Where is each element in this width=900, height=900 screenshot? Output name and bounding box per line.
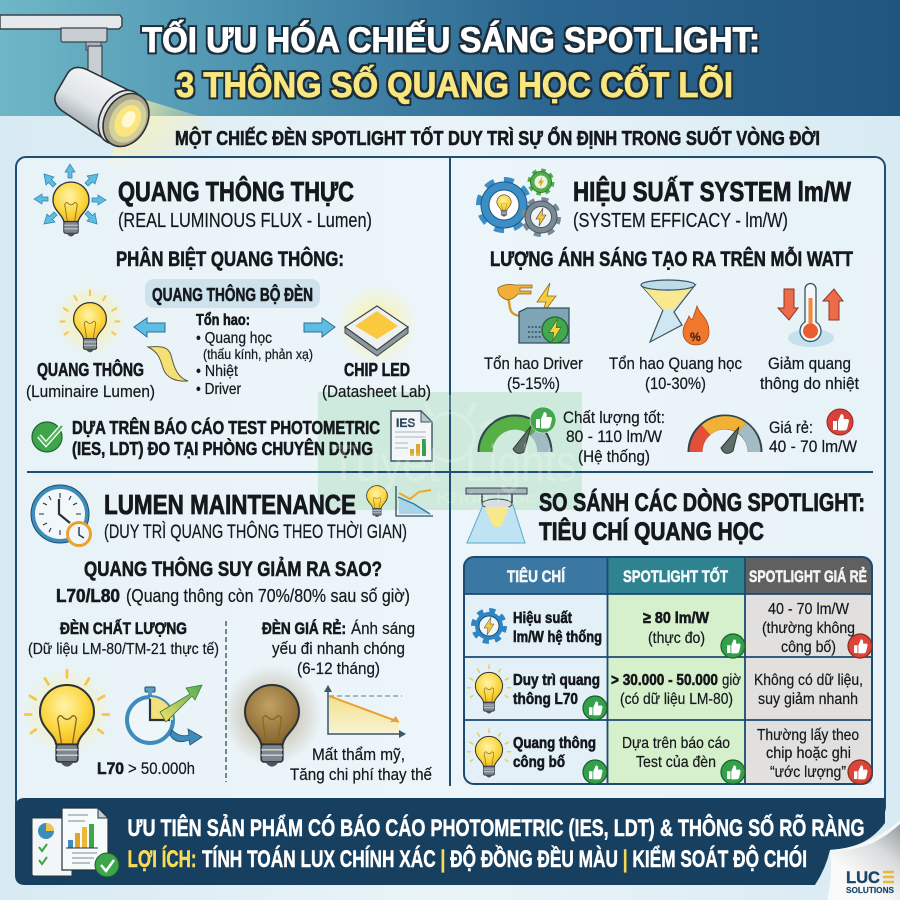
- header band: [0, 0, 900, 116]
- icon: track spotlight: [0, 15, 158, 155]
- row: published flux: Test của đèn: [636, 754, 716, 771]
- row: efficacy: Hiệu suất: [513, 610, 572, 627]
- watermark background inside panel: [318, 392, 582, 510]
- icon: driver loss: [498, 283, 569, 343]
- icon: IES document: [391, 411, 432, 461]
- quality lamp label: (Dữ liệu LM-80/TM-21 thực tế): [28, 641, 219, 658]
- row: published flux: Thường lấy theo: [757, 727, 859, 744]
- L70 definition: (Quang thông còn 70%/80% sau số giờ): [126, 586, 410, 606]
- photometric note: (IES, LDT) ĐO TẠI PHÒNG CHUYÊN DỤNG: [72, 438, 373, 459]
- row: published flux: Quang thông: [513, 735, 596, 752]
- heading: [539, 487, 865, 546]
- section heading: QUANG THÔNG SUY GIẢM RA SAO?: [84, 557, 382, 581]
- row: maintenance: (có dữ liệu LM-80): [620, 691, 733, 708]
- gauge: cheap quality: [695, 422, 755, 453]
- label: luminaire lumen: QUANG THÔNG: [37, 359, 144, 380]
- L70 definition: L70/L80: [56, 586, 120, 606]
- comparison table: [464, 557, 872, 784]
- icon: clock: [31, 485, 90, 546]
- title: TỐI ƯU HÓA CHIẾU SÁNG SPOTLIGHT:: [142, 20, 760, 60]
- arrow: to chip: [304, 318, 335, 337]
- label: heat loss: [760, 354, 859, 393]
- cheap lamp label: Ánh sáng: [351, 619, 415, 638]
- photometric note: [72, 417, 380, 459]
- label: chip: (Datasheet Lab): [322, 382, 431, 401]
- row: efficacy: lm/W hệ thống: [513, 629, 602, 646]
- label: consequences: Tăng chi phí thay thế: [290, 765, 432, 784]
- label: chip: [322, 360, 431, 401]
- logo: LUC: [846, 868, 880, 887]
- watermark: Khóa Học: [436, 490, 537, 507]
- heading: TIÊU CHÍ QUANG HỌC: [539, 516, 764, 546]
- logo: [846, 868, 895, 895]
- bottom banner: [15, 798, 885, 885]
- chart: lumen decay: [324, 685, 406, 738]
- loss list: • Nhiệt: [196, 363, 238, 380]
- label: good efficacy: Chất lượng tốt:: [563, 408, 665, 427]
- label: consequences: [290, 745, 432, 784]
- icon: optical loss funnel: %: [690, 330, 701, 344]
- label: good efficacy: 80 - 110 lm/W: [566, 427, 662, 446]
- loss list: (thấu kính, phản xạ): [203, 347, 313, 362]
- cheap lamp label: [262, 619, 415, 678]
- label: good efficacy: (Hệ thống): [578, 447, 650, 466]
- pill: luminaire flux: [145, 279, 320, 308]
- logo: SOLUTIONS: [846, 886, 895, 895]
- row: published flux: [467, 727, 859, 781]
- icon: stopwatch with arrows: [127, 685, 202, 745]
- subheading: (REAL LUMINOUS FLUX - Lumen): [118, 210, 372, 232]
- loss list: • Quang học: [196, 330, 272, 347]
- row: efficacy: ≥ 80 lm/W: [643, 610, 710, 627]
- row: published flux: Dựa trên báo cáo: [622, 735, 730, 752]
- icon: gears: [480, 171, 558, 234]
- label: heat loss: thông do nhiệt: [760, 374, 859, 393]
- main panel frame: [16, 157, 885, 817]
- photometric note: DỰA TRÊN BÁO CÁO TEST PHOTOMETRIC: [72, 417, 380, 438]
- watermark: [330, 395, 577, 507]
- row: published flux: công bố: [513, 754, 565, 771]
- label: cheap efficacy: 40 - 70 lm/W: [769, 437, 857, 456]
- row: efficacy: (thực đo): [648, 630, 705, 647]
- vertical divider: [449, 157, 451, 786]
- panel: system efficacy: [480, 171, 859, 466]
- panel: comparison: [464, 487, 872, 784]
- icon: LED chip: [337, 285, 417, 365]
- row: maintenance: Không có dữ liệu,: [754, 672, 863, 689]
- row: efficacy: (thường không: [762, 620, 855, 637]
- loss list: • Driver: [196, 381, 242, 398]
- page curl with logo: [827, 820, 900, 900]
- icon: ceiling spotlight: [466, 488, 527, 543]
- icon: dim bulb: [222, 665, 322, 767]
- title: 3 THÔNG SỐ QUANG HỌC CỐT LÕI: [176, 65, 733, 105]
- label: L70 hours: L70: [97, 759, 124, 778]
- quality lamp label: [28, 619, 219, 658]
- light beam: [105, 100, 215, 165]
- heading: LUMEN MAINTENANCE: [104, 489, 356, 520]
- label: L70 hours: [97, 759, 195, 778]
- row: maintenance: Duy trì quang: [513, 672, 600, 689]
- watermark: Lights: [465, 435, 577, 493]
- icon: thumb badge: [827, 409, 853, 435]
- icon: declining chart: [396, 486, 433, 516]
- icon: bulb with arrows: [34, 164, 106, 236]
- label: cheap efficacy: [769, 418, 857, 456]
- icon: report documents: [32, 808, 119, 877]
- quality lamp label: ĐÈN CHẤT LƯỢNG: [60, 619, 187, 638]
- label: optical loss: [609, 354, 742, 393]
- table header: SPOTLIGHT TỐT: [623, 566, 728, 586]
- row: published flux: chip hoặc ghi: [766, 745, 851, 762]
- label: driver loss: [484, 354, 583, 393]
- icon: loss ribbon: [148, 347, 188, 381]
- heading: QUANG THÔNG THỰC: [118, 175, 354, 207]
- label: cheap efficacy: Giá rẻ:: [769, 418, 813, 437]
- banner line 2: TÍNH TOÁN LUX CHÍNH XÁC | ĐỘ ĐỒNG ĐỀU MÀU | KIỂM SOÁT ĐỘ CHÓI: [202, 845, 807, 873]
- banner line 2: LỢI ÍCH:: [128, 845, 196, 873]
- row: efficacy: [474, 601, 855, 656]
- panel: real luminous flux: [26, 164, 432, 461]
- cheap lamp label: (6-12 tháng): [297, 659, 380, 678]
- horizontal divider: [27, 471, 873, 473]
- label: luminaire lumen: (Luminaire Lumen): [26, 382, 155, 401]
- icon: glowing bulb: [54, 284, 126, 356]
- subheading: (SYSTEM EFFICACY - lm/W): [573, 210, 788, 232]
- label: L70 hours: > 50.000h: [128, 759, 195, 778]
- subheading: (DUY TRÌ QUANG THÔNG THEO THỜI GIAN): [104, 521, 407, 543]
- dashed separator: [225, 621, 227, 782]
- label: heat loss: Giảm quang: [768, 354, 851, 373]
- row: efficacy: công bố): [781, 639, 836, 656]
- label: luminaire lumen: [26, 359, 155, 401]
- section heading: PHÂN BIỆT QUANG THÔNG:: [116, 247, 344, 271]
- loss list: Tổn hao:: [196, 311, 250, 329]
- cheap lamp label: ĐÈN GIÁ RẺ:: [262, 619, 346, 638]
- label: chip: CHIP LED: [344, 360, 410, 380]
- table header: TIÊU CHÍ: [507, 567, 565, 586]
- row: maintenance: [467, 665, 863, 714]
- table cells: [464, 557, 872, 784]
- row: maintenance: suy giảm nhanh: [758, 691, 858, 708]
- title: [142, 20, 760, 105]
- icon: thermometer: [778, 284, 843, 347]
- label: good efficacy: [563, 408, 665, 466]
- icon: optical loss funnel: [641, 280, 709, 345]
- table header: [464, 557, 872, 594]
- label: driver loss: Tổn hao Driver: [484, 354, 583, 373]
- label: consequences: Mất thẩm mỹ,: [312, 745, 405, 764]
- label: driver loss: (5-15%): [507, 374, 560, 393]
- icon: small bulb: [367, 486, 387, 517]
- cheap lamp label: yếu đi nhanh chóng: [272, 639, 405, 658]
- row: published flux: “ước lượng”: [770, 764, 846, 781]
- row: maintenance: giờ: [722, 672, 741, 689]
- gauge: good quality: [485, 407, 556, 453]
- row: efficacy: 40 - 70 lm/W: [768, 601, 850, 618]
- label: optical loss: Tổn hao Quang học: [609, 354, 742, 373]
- panel: lumen maintenance: [23, 485, 433, 784]
- pill: luminaire flux: QUANG THÔNG BỘ ĐÈN: [152, 284, 313, 305]
- icon: IES document: IES: [396, 416, 415, 430]
- thumb badges: [583, 634, 872, 784]
- arrow: to luminaire: [134, 318, 165, 337]
- row: maintenance: > 30.000 - 50.000: [611, 672, 718, 689]
- icon: check: [32, 422, 62, 452]
- row: maintenance: thông L70: [513, 691, 578, 708]
- watermark: Tuyet: [330, 435, 440, 493]
- loss list: [196, 311, 313, 398]
- label: optical loss: (10-30%): [645, 374, 706, 393]
- icon: bright bulb: [23, 668, 111, 767]
